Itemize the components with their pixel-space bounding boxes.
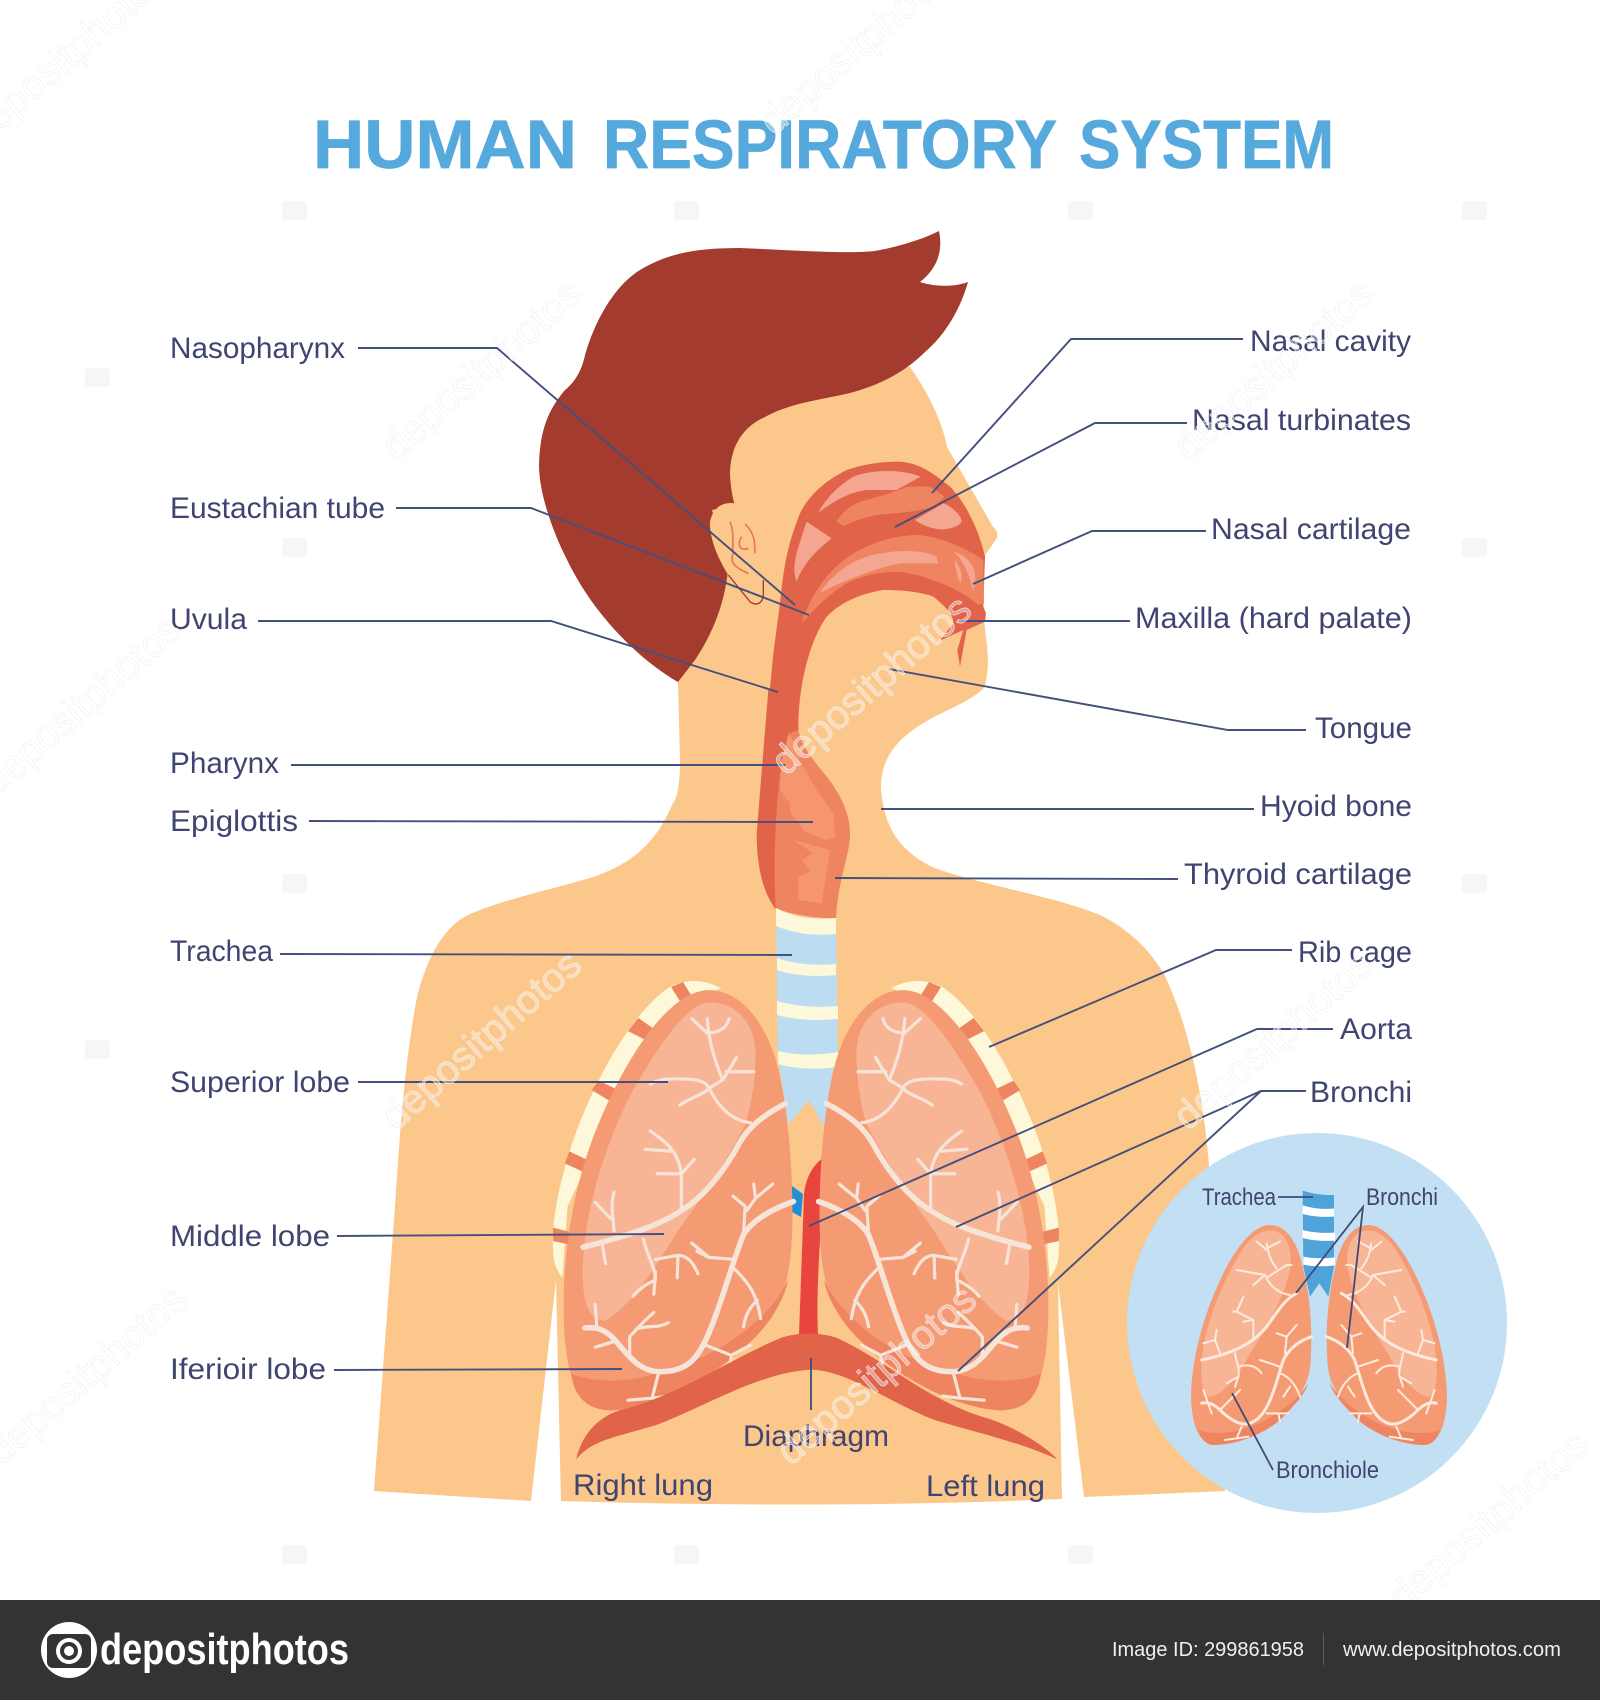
labels: right column: Bronchi — [1310, 1076, 1412, 1109]
footer credits — [1112, 1633, 1561, 1665]
inset: bronchi detail circle — [1127, 1133, 1507, 1513]
labels: left column: Superior lobe — [170, 1066, 350, 1099]
footer logo: depositphotos — [100, 1625, 349, 1674]
labels: bottom: Right lung — [573, 1469, 713, 1502]
inset leader lines — [1232, 1197, 1363, 1470]
blue pulmonary vessel — [792, 1186, 803, 1217]
labels: right column: Hyoid bone — [1260, 790, 1412, 823]
labels: left column: Eustachian tube — [170, 492, 385, 525]
labels: left column: Uvula — [170, 603, 247, 636]
aorta — [799, 1158, 823, 1335]
inset trachea — [1303, 1191, 1335, 1297]
throat: pharynx and epiglottis — [757, 690, 850, 918]
labels: left column: Iferioir lobe — [170, 1353, 326, 1386]
labels: right column: Nasal cartilage — [1211, 513, 1411, 546]
labels: right column: Thyroid cartilage — [1184, 858, 1412, 891]
labels: bottom: Left lung — [926, 1470, 1045, 1503]
title: HUMAN — [313, 106, 577, 183]
ear — [710, 503, 763, 604]
inset lungs — [1191, 1225, 1447, 1445]
labels: left column: Middle lobe — [170, 1220, 330, 1253]
labels: right column: Nasal cavity — [1250, 325, 1411, 358]
right lung — [553, 981, 793, 1410]
nasal cavity and upper airway — [765, 462, 986, 740]
leader lines — [258, 339, 1333, 1410]
footer credits: www.depositphotos.com — [1342, 1639, 1561, 1661]
footer bar — [0, 1600, 1600, 1700]
labels: right column: Tongue — [1315, 712, 1412, 745]
labels: left column: Epiglottis — [170, 805, 298, 838]
title — [313, 106, 1334, 183]
inset label: Bronchi: Bronchi — [1366, 1184, 1438, 1211]
labels: right column: Rib cage — [1298, 936, 1412, 969]
watermark camera marks — [85, 201, 1487, 1564]
watermarks: depositphotos — [373, 272, 590, 469]
watermarks: depositphotos — [1165, 272, 1382, 469]
labels: right column: Nasal turbinates — [1192, 404, 1411, 437]
footer logo — [41, 1622, 349, 1678]
watermarks: depositphotos — [1380, 1422, 1597, 1619]
watermarks: depositphotos — [1165, 942, 1382, 1139]
diaphragm — [576, 1333, 1057, 1459]
title: SYSTEM — [1079, 106, 1334, 183]
left lung — [819, 981, 1059, 1410]
inset label: Bronchiole: Bronchiole — [1276, 1457, 1379, 1484]
watermarks: depositphotos — [763, 587, 980, 784]
labels: right column — [1135, 325, 1412, 1109]
labels: right column: Maxilla (hard palate) — [1135, 602, 1412, 635]
labels: left column: Pharynx — [170, 747, 279, 780]
inset label: Trachea: Trachea — [1202, 1184, 1277, 1211]
footer credits: Image ID: 299861958 — [1112, 1639, 1304, 1661]
title: RESPIRATORY — [603, 106, 1057, 183]
labels: bottom: Diaphragm — [743, 1420, 889, 1453]
hair — [539, 231, 968, 682]
trachea — [776, 908, 838, 1200]
labels: right column: Aorta — [1340, 1013, 1412, 1046]
labels: bottom — [573, 1420, 1045, 1503]
watermarks: depositphotos — [768, 1277, 985, 1474]
body silhouette — [374, 367, 1225, 1505]
labels: left column: Trachea — [170, 935, 273, 968]
labels: left column: Nasopharynx — [170, 332, 345, 365]
labels: left column — [170, 332, 385, 1386]
watermarks: depositphotos — [373, 942, 590, 1139]
